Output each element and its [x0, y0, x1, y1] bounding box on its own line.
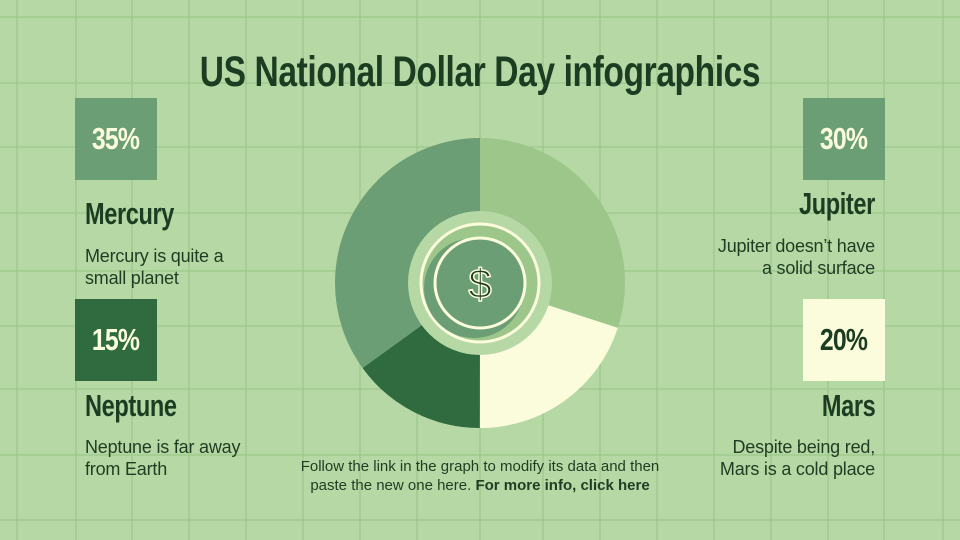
panel: mars: 20% — [820, 322, 868, 357]
panel: neptune: 15% — [92, 322, 140, 357]
footnote — [301, 458, 659, 494]
panel: neptune: Neptune is far away — [85, 437, 240, 457]
panel: neptune: Neptune — [85, 388, 177, 423]
panel: mercury: Mercury is quite a — [85, 246, 223, 266]
panel: mercury: small planet — [85, 268, 179, 288]
panel: mars — [720, 299, 885, 479]
panel: jupiter: 30% — [820, 121, 868, 156]
panel: mars: Mars — [822, 388, 875, 423]
footnote: paste the new one here. For more info, click here — [310, 477, 650, 494]
panel: mars: Despite being red, — [732, 437, 875, 457]
panel: mercury — [75, 98, 224, 288]
panel: mercury: 35% — [92, 121, 140, 156]
panel: neptune: from Earth — [85, 459, 167, 479]
panel: jupiter: Jupiter — [799, 186, 875, 221]
icon: dollar coin — [408, 211, 552, 355]
title: US National Dollar Day infographics — [200, 48, 760, 96]
panel: jupiter: a solid surface — [762, 258, 875, 278]
donut chart — [335, 138, 625, 428]
panel: neptune — [75, 299, 240, 479]
panel: mars: Mars is a cold place — [720, 459, 875, 479]
panel: mercury: Mercury — [85, 196, 174, 231]
panel: jupiter: Jupiter doesn’t have — [718, 236, 875, 256]
footnote: Follow the link in the graph to modify its data and then — [301, 458, 659, 475]
icon: dollar coin: $ — [468, 260, 492, 307]
panel: jupiter — [718, 98, 885, 278]
